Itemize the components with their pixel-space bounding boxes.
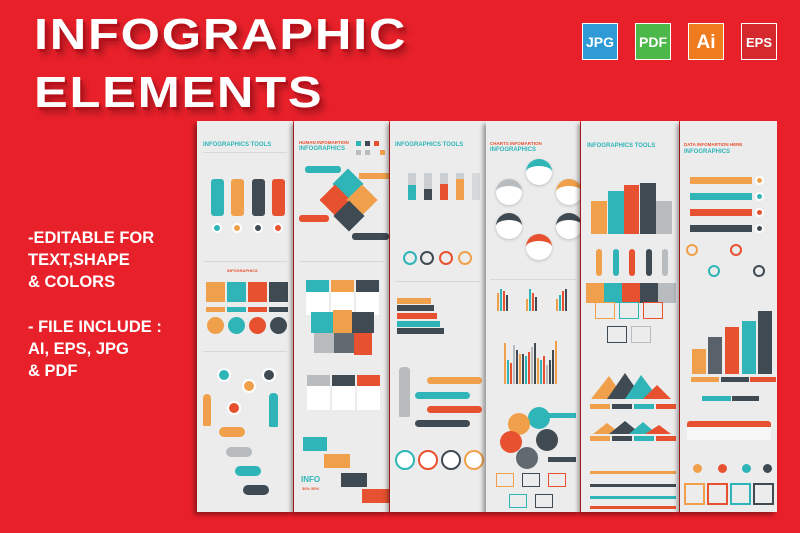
title xyxy=(34,10,410,117)
title: INFOGRAPHIC xyxy=(34,10,407,59)
panel: page 5 infographics tools: INFOGRAPHICS TOOLS xyxy=(587,143,655,149)
panel: page 6 data information: INFOGRAPHICS xyxy=(684,149,730,155)
panel: page 6 data information xyxy=(680,121,777,512)
panel: page 2 human information: HUMAN INFOMARTION xyxy=(299,140,349,145)
icon: Ai: Ai xyxy=(696,32,716,53)
panel: page 2 human information: 30% 50% xyxy=(302,486,319,491)
feature text xyxy=(28,229,154,291)
panel: page 4 charts information: CHARTS INFOMARTION xyxy=(490,141,542,146)
feature text: TEXT,SHAPE xyxy=(28,251,130,269)
file include text: AI, EPS, JPG xyxy=(28,340,129,358)
panel: page 1 infographics tools xyxy=(197,121,293,512)
icon: PDF: PDF xyxy=(639,34,667,50)
panel: page 3 infographics tools xyxy=(390,121,486,512)
3D bar chart xyxy=(692,349,706,374)
panel: page 4 charts information: INFOGRAPHICS xyxy=(490,147,536,153)
icon: PDF xyxy=(635,23,671,60)
feature text: -EDITABLE FOR xyxy=(28,229,154,247)
panel: page 2 human information xyxy=(294,121,389,512)
panel: page 2 human information: INFO xyxy=(301,475,320,484)
panel: page 4 charts information xyxy=(486,121,580,512)
icon: JPG: JPG xyxy=(586,34,614,50)
panel: page 3 infographics tools: INFOGRAPHICS TOOLS xyxy=(395,142,463,148)
panel: page 5 infographics tools xyxy=(581,121,679,512)
file include text: - FILE INCLUDE : xyxy=(28,318,162,336)
file format icons xyxy=(582,23,777,60)
icon: EPS xyxy=(741,23,777,60)
file include text: & PDF xyxy=(28,362,78,380)
file include text xyxy=(28,318,162,380)
icon: JPG xyxy=(582,23,618,60)
panel: page 1 infographics tools: INFOGRAPHICS xyxy=(227,268,258,273)
icon: Ai xyxy=(688,23,724,60)
icon: EPS: EPS xyxy=(746,35,772,50)
title: ELEMENTS xyxy=(34,68,323,117)
feature text: & COLORS xyxy=(28,273,115,291)
mountains xyxy=(591,373,671,434)
panel: page 2 human information: INFOGRAPHICS xyxy=(299,146,345,152)
panel: page 6 data information: DATA INFOMARTION HERE xyxy=(684,142,742,147)
panel: page 1 infographics tools: INFOGRAPHICS TOOLS xyxy=(203,142,271,148)
big bar chart xyxy=(504,341,557,384)
